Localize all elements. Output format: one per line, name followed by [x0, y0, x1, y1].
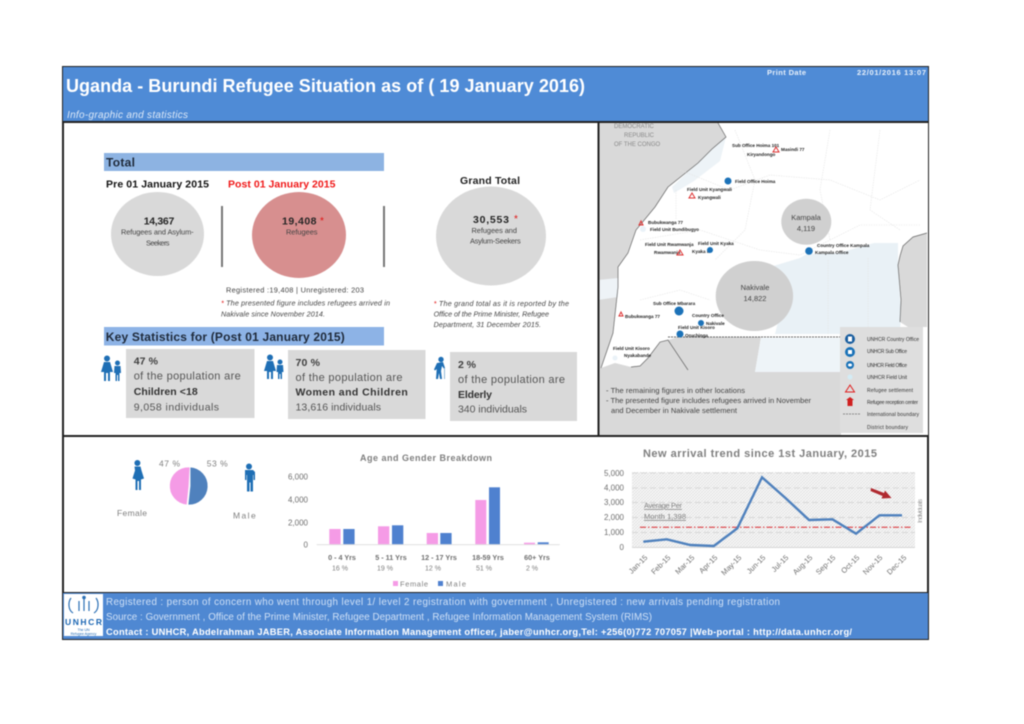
circle: grand total: [436, 186, 546, 286]
panel dividers: [63, 121, 928, 594]
heading: total: Total: [106, 156, 135, 170]
plot background: [632, 472, 915, 548]
map: location markers and labels: Masindi 77: [781, 147, 805, 152]
map: location markers and labels: Kyangwali: [698, 195, 721, 200]
label: grand total: Grand Total: [460, 175, 520, 187]
icon: male: [245, 464, 255, 492]
footer: contact: Contact : UNHCR, Abdelrahman JABER, Associate Information Management officer, jaber@unhcr.org,Tel: +256(0)772 707057 |Web-portal : http://data.unhcr.org/: [106, 627, 852, 637]
map: location markers and labels: Bubukwanga 77: [625, 314, 660, 319]
stat box: children: 9,058 individuals: [134, 402, 219, 414]
circle: Kampala: [781, 199, 831, 245]
panel: totals: [104, 153, 569, 329]
footer: source: Source : Government , Office of the Prime Minister, Refugee Department , Refugee Information Management System (RIMS): [106, 612, 652, 623]
footnote: post figure: Nakivale since November 2014.: [221, 310, 325, 319]
subtitle: Info-graphic and statistics: [67, 110, 188, 121]
circle: pre 2015 total: Refugees and Asylum-: [121, 228, 194, 236]
percentage labels: 51 %: [476, 566, 492, 572]
stat box: women and children: 13,616 individuals: [296, 402, 381, 414]
circle: post 2015 total: [252, 192, 346, 278]
footnote: post figure: * The presented figure includes refugees arrived in: [221, 299, 390, 308]
line chart: new arrivals trend: [604, 448, 924, 577]
map: location markers and labels: Sub Office Mbarara: [653, 301, 696, 306]
logo: UNHCR: UNHCR: [65, 617, 102, 627]
y axis labels: 5,000: [604, 469, 625, 478]
map: location markers and labels: Kyaka II: [692, 249, 709, 254]
legend: refugee reception: Refugee reception center: [867, 400, 918, 406]
map: location markers and labels: Rwamwanja: [654, 250, 681, 255]
icon: woman and child: [101, 356, 121, 381]
legend: district boundary: District boundary: [867, 425, 908, 431]
map: DRC label: OF THE CONGO: [614, 142, 661, 148]
bars: [329, 487, 549, 544]
percentage labels: 2 %: [526, 566, 538, 572]
map: location markers and labels: Country Office: [692, 313, 724, 318]
map: location markers and labels: Field Unit Kyangwali: [687, 187, 732, 192]
average line: [640, 526, 912, 528]
pie chart: [169, 467, 208, 505]
y axis labels: 4,000: [288, 496, 309, 504]
legend: field unit: UNHCR Field Unit: [867, 375, 908, 381]
stat box: women and children: [288, 350, 426, 419]
y axis labels: 3,000: [604, 498, 625, 507]
label: pre 2015: Pre 01 January 2015: [106, 178, 209, 190]
circle: Nakivale: [716, 261, 793, 331]
map: location markers and labels: Field Unit Kisoro: [678, 325, 715, 330]
circle: grand total: *: [514, 214, 518, 225]
circle: grand total: Asylum-Seekers: [470, 236, 521, 246]
logo: UNHCR: The UN: [77, 628, 90, 632]
heading: total: [104, 153, 384, 171]
percentage labels: 16 %: [332, 566, 348, 572]
map legend: [614, 124, 923, 433]
circle: post 2015 total: *: [320, 216, 324, 227]
circle: pre 2015 total: [111, 192, 204, 276]
x axis labels: [627, 553, 908, 577]
x axis labels: Jul-15: [770, 553, 790, 574]
map: location markers and labels: Oruchinga: [685, 333, 708, 338]
stat box: elderly: Elderly: [458, 389, 492, 401]
y axis labels: 6,000: [288, 472, 309, 482]
map: location markers and labels: Kampala Office: [815, 250, 849, 255]
legend: field office: [846, 361, 907, 369]
x axis labels: Oct-15: [839, 553, 861, 575]
legend: field unit: [848, 374, 908, 381]
stat box: elderly: of the population are: [458, 374, 565, 386]
average label: [644, 501, 686, 521]
category labels: 18-59 Yrs: [472, 553, 504, 562]
footnote: post figure: [221, 299, 390, 319]
legend: country office: UNHCR Country Office: [867, 337, 919, 343]
pie label female: 47 %: [159, 458, 180, 468]
stat box: elderly: 340 individuals: [458, 404, 527, 416]
panel: header band: [63, 67, 928, 122]
map: note: [606, 386, 812, 415]
panel: footer: [63, 593, 928, 639]
axis title: Individuals: [917, 498, 924, 523]
heading: key statistics: Key Statistics for (Post 01 January 2015): [106, 330, 345, 344]
panel: outer frame: [63, 67, 928, 639]
panel: map: [598, 123, 928, 436]
stat box: women and children: Women and Children: [296, 386, 408, 398]
map: note: - The presented figure includes refugees arrived in November: [606, 396, 812, 405]
chart title: New arrival trend since 1st January, 2015: [643, 448, 877, 460]
legend: international boundary: International boundary: [867, 412, 920, 418]
heading: key statistics: [104, 327, 384, 346]
y axis labels: 2,000: [604, 513, 625, 522]
map: location markers and labels: Kiryandongo: [747, 152, 776, 157]
print date value: 22/01/2016 13:07: [857, 68, 926, 77]
map: location markers and labels: Nakivale: [706, 321, 725, 326]
stat box: children: Children <18: [134, 386, 198, 398]
map: location markers and labels: Field Unit Kyaka: [698, 241, 734, 246]
map: district lines: [640, 130, 920, 338]
map: location markers and labels: Field Office Hoima: [735, 179, 776, 184]
stat box: women and children: of the population are: [296, 372, 402, 384]
map: location markers and labels: Field Unit Bundibugyo: [650, 227, 699, 232]
stat box: elderly: [450, 352, 577, 421]
legend: refugee reception: [846, 397, 918, 406]
title: Uganda - Burundi Refugee Situation as of ( 19 January 2016): [66, 76, 585, 96]
map: location markers and labels: Field Unit Rwamwanja: [645, 242, 694, 247]
footnote: grand total: [434, 299, 569, 329]
circle: grand total: 30,553: [473, 214, 509, 226]
circle: Kampala: Kampala: [791, 213, 822, 222]
logo: UNHCR: Refugee Agency: [71, 632, 97, 636]
x axis labels: Apr-15: [697, 553, 719, 575]
percentage labels: 19 %: [377, 566, 393, 572]
x axis labels: Jun-15: [745, 553, 767, 576]
grid lines: [632, 473, 915, 548]
map: location markers and labels: [612, 143, 870, 360]
map: note: and December in Nakivale settlement: [611, 406, 738, 415]
footnote: grand total: * The grand total as it is reported by the: [434, 299, 569, 308]
average label: Average Per: [644, 501, 682, 510]
map: location markers and labels: Country Office Kampala: [817, 243, 870, 248]
icon: elderly person: [434, 357, 445, 379]
print date label: Print Date: [767, 68, 806, 77]
logo: UNHCR: [64, 594, 103, 636]
y axis labels: 2,000: [288, 518, 309, 528]
legend: sub office: [845, 347, 907, 357]
icon: female: [132, 460, 144, 490]
footnote: grand total: Department, 31 December 2015.: [434, 320, 541, 329]
circle: Nakivale: 14,822: [744, 294, 766, 303]
legend: country office: [845, 334, 919, 344]
label male: Male: [233, 510, 256, 520]
map: DRC label: [614, 124, 661, 148]
y axis labels: [604, 469, 625, 552]
percentage labels: [332, 566, 538, 572]
trend line: [643, 477, 902, 546]
stat box: children: [126, 349, 254, 418]
stat box: elderly: 2 %: [458, 359, 477, 371]
map: lake region: [598, 137, 901, 372]
map: note: - The remaining figures in other locations: [606, 386, 745, 395]
legend: sub office: UNHCR Sub Office: [867, 349, 907, 355]
panel: gender split: [117, 458, 256, 520]
circle: Kampala: 4,119: [797, 224, 815, 233]
circle: post 2015 total: Refugees: [286, 228, 318, 236]
legend: field office: UNHCR Field Office: [867, 363, 907, 369]
map: DRC label: REPUBLIC: [624, 133, 655, 139]
footer: definitions: Registered : person of concern who went through level 1/ level 2 registration with government , Unregistered : new arrivals pending registration: [106, 597, 780, 608]
y axis labels: 4,000: [604, 484, 625, 492]
y axis labels: [288, 472, 309, 550]
x axis labels: Nov-15: [861, 553, 884, 577]
x axis labels: Aug-15: [791, 553, 814, 577]
y axis labels: 0: [620, 543, 625, 552]
registered split: Registered :19,408 | Unregistered: 203: [226, 286, 364, 295]
map: surrounding countries: [599, 123, 927, 436]
stat box: children: of the population are: [134, 370, 241, 382]
pie label male: 53 %: [207, 458, 228, 468]
map: location markers and labels: Bubukwanga 77: [648, 220, 683, 225]
x axis labels: Feb-15: [649, 553, 672, 576]
x axis labels: Mar-15: [673, 553, 696, 576]
legend: refugee settlement: Refugee settlement: [867, 388, 914, 394]
circle: post 2015 total: 19,408: [282, 216, 317, 228]
category labels: [328, 553, 550, 562]
x axis labels: Jan-15: [627, 553, 649, 576]
category labels: 0 - 4 Yrs: [328, 553, 356, 562]
circle: pre 2015 total: 14,367: [144, 216, 174, 228]
y axis labels: 0: [304, 540, 309, 550]
x axis labels: Sep-15: [814, 553, 837, 577]
circle: grand total: Refugees and: [472, 226, 517, 235]
trend arrow: [870, 488, 892, 498]
map: DRC label: DEMOCRATIC: [614, 124, 655, 130]
legend: [393, 580, 466, 588]
legend: Male: [446, 580, 466, 588]
map: location markers and labels: Field Unit Kisoro: [613, 346, 650, 351]
circle: pre 2015 total: Seekers: [146, 238, 170, 248]
category labels: 5 - 11 Yrs: [375, 553, 407, 562]
divider right: [383, 206, 385, 267]
chart title: Age and Gender Breakdown: [360, 453, 492, 463]
label: post 2015: Post 01 January 2015: [228, 178, 336, 190]
stat box: women and children: 70 %: [296, 357, 321, 369]
divider left: [221, 206, 223, 267]
footnote: grand total: Office of the Prime Minister, Refugee: [434, 310, 549, 319]
category labels: 12 - 17 Yrs: [421, 553, 457, 562]
map: location markers and labels: Nyakabande: [624, 353, 652, 358]
y axis labels: 1,000: [604, 528, 625, 537]
label female: Female: [117, 508, 147, 518]
stat box: children: 47 %: [134, 356, 159, 368]
icon: woman and child 2: [264, 354, 284, 379]
map: boundaries: [601, 123, 927, 370]
x axis labels: Dec-15: [885, 553, 908, 577]
map: location markers and labels: Sub Office Hoima 101: [732, 143, 780, 148]
category labels: 60+ Yrs: [524, 553, 550, 562]
legend: international boundary: [843, 412, 920, 418]
bar chart: age and gender: [288, 453, 560, 588]
panel: key statistics: [101, 327, 577, 421]
x axis labels: May-15: [719, 553, 743, 577]
circle: Nakivale: Nakivale: [741, 283, 769, 292]
legend: refugee settlement: [846, 385, 914, 394]
legend: Female: [400, 580, 428, 588]
percentage labels: 12 %: [425, 566, 441, 572]
average label: Month 1,398: [644, 512, 686, 521]
